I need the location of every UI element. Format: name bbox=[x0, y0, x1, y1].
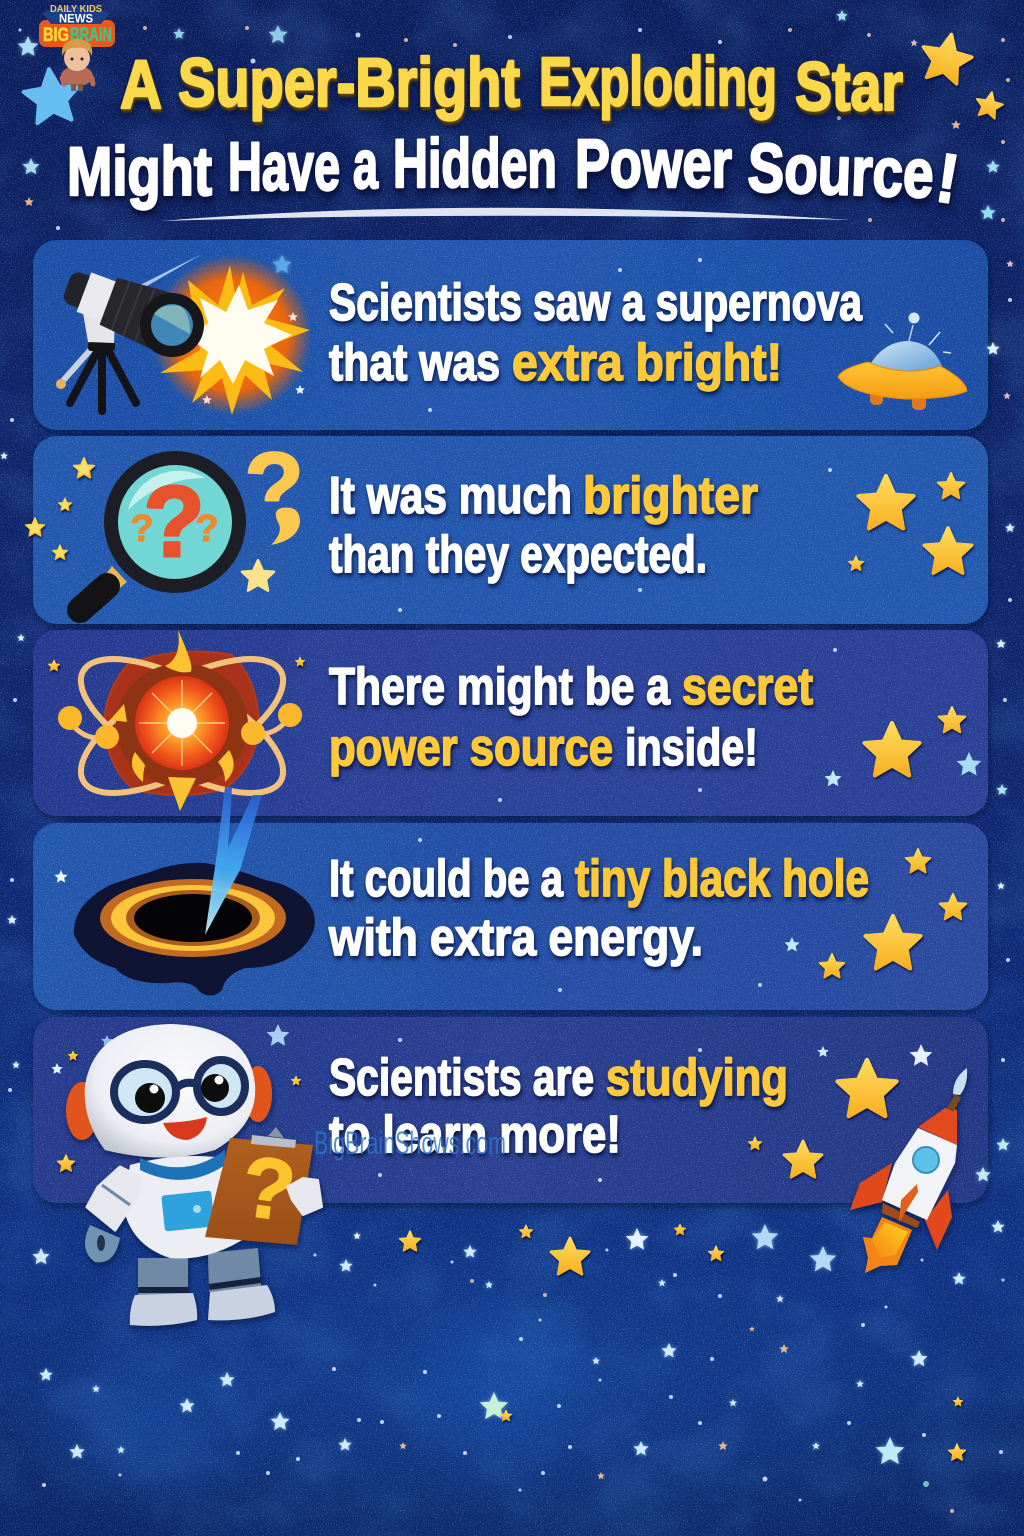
logo text: news: NEWS bbox=[59, 12, 93, 26]
mascot boy bbox=[61, 39, 93, 91]
logo: Daily Kids News with Big Brain bbox=[22, 4, 115, 124]
line 1 gold: secret bbox=[682, 658, 813, 716]
panel: scientists studying bbox=[33, 1017, 988, 1203]
panel 2 text bbox=[329, 467, 758, 584]
dark red shell bbox=[104, 652, 259, 795]
line 1 white: Scientists are bbox=[329, 1049, 594, 1107]
inner shell bbox=[116, 663, 248, 787]
panel 4 text bbox=[328, 850, 869, 967]
collar bbox=[140, 1150, 225, 1180]
panel 5 stars bbox=[57, 1051, 896, 1177]
window bbox=[913, 1147, 939, 1173]
core centre bbox=[167, 708, 197, 738]
small orange question mark left: ? bbox=[130, 508, 154, 550]
title line 1 bbox=[120, 43, 903, 125]
inner brown ring bbox=[126, 890, 260, 946]
panel 1 text bbox=[329, 274, 863, 392]
title line 2: Source bbox=[746, 129, 935, 212]
watermark: BigBrainShows.com bbox=[314, 1125, 506, 1161]
logo band bbox=[39, 20, 115, 47]
spike bottom bbox=[168, 777, 196, 811]
electrons bbox=[58, 703, 302, 749]
panel 3 text bbox=[329, 658, 813, 777]
head bbox=[85, 1024, 255, 1158]
handle collar bbox=[104, 566, 127, 592]
icon: supernova explosion bbox=[152, 255, 312, 415]
crescent right bbox=[218, 750, 234, 782]
icon: black hole bbox=[74, 863, 315, 996]
line 2 gold: extra bright! bbox=[512, 334, 782, 392]
icon: rocket bbox=[850, 1068, 967, 1273]
logo text: brain: BRAIN bbox=[70, 25, 112, 46]
icon: glowing star bbox=[233, 550, 283, 597]
line 1 gold: brighter bbox=[583, 467, 758, 525]
legs bbox=[138, 1258, 188, 1295]
icon: atom core bbox=[58, 630, 302, 819]
panel 2 stars left bbox=[26, 458, 94, 559]
handle bbox=[80, 586, 107, 610]
left arm bbox=[87, 1167, 140, 1230]
panel 5 pale stars bbox=[51, 1024, 932, 1074]
icon: magnifying glass with question marks bbox=[80, 451, 246, 610]
frame bbox=[104, 451, 246, 593]
line 2: with extra energy. bbox=[328, 909, 703, 967]
panel 4 pale stars bbox=[54, 870, 800, 951]
event horizon bbox=[134, 894, 252, 942]
gold stars: sky bbox=[291, 29, 1005, 1460]
hook arm bbox=[85, 1225, 120, 1262]
panel: brighter than expected bbox=[33, 436, 988, 624]
center fin bbox=[899, 1184, 918, 1222]
ears bbox=[66, 1082, 98, 1140]
glasses bbox=[114, 1060, 245, 1120]
saucer legs bbox=[870, 390, 883, 405]
panel: supernova seen bbox=[33, 240, 988, 430]
line 2: than they expected. bbox=[329, 526, 707, 584]
line 2 white: inside! bbox=[625, 719, 758, 777]
logo text: daily kids: DAILY KIDS bbox=[50, 4, 102, 15]
hand bbox=[287, 1178, 322, 1215]
title line 1: A bbox=[120, 46, 162, 123]
icon: blue star bbox=[22, 66, 82, 124]
tube bbox=[56, 257, 183, 354]
line 1 gold: tiny black hole bbox=[575, 850, 869, 908]
right fin bbox=[925, 1190, 952, 1250]
title line 2: ! bbox=[932, 139, 964, 218]
outer ring bbox=[100, 879, 286, 957]
title line 2: Power bbox=[575, 125, 732, 202]
icon: beam of light bbox=[205, 787, 262, 935]
flame bbox=[863, 1217, 912, 1273]
chest screen bbox=[161, 1190, 215, 1232]
title line 2 bbox=[67, 125, 964, 218]
clipboard question mark: ? bbox=[235, 1138, 301, 1240]
logo badge top bbox=[42, 6, 110, 24]
small orange question mark right: ? bbox=[195, 508, 219, 550]
icon: yellow question mark: ? bbox=[244, 432, 304, 542]
mouth bbox=[163, 1117, 207, 1140]
signal ticks bbox=[885, 324, 951, 353]
line 1 white: It could be a bbox=[329, 850, 564, 908]
line 1: Scientists saw a supernova bbox=[329, 274, 863, 332]
line 2: to learn more! bbox=[329, 1106, 621, 1164]
panel 2 stars right bbox=[848, 473, 972, 573]
nozzle bbox=[882, 1203, 920, 1228]
clip bbox=[251, 1135, 296, 1148]
line 1 gold: studying bbox=[606, 1049, 788, 1107]
title line 1: Exploding bbox=[539, 43, 777, 120]
left fin bbox=[850, 1163, 892, 1210]
shooting streak bbox=[138, 254, 202, 290]
panel: secret power source bbox=[33, 630, 988, 816]
crescent top bbox=[165, 630, 192, 672]
panel: tiny black hole bbox=[33, 823, 988, 1010]
pupils bbox=[135, 1083, 165, 1113]
dark cloud bbox=[74, 863, 315, 996]
line 2 gold: power source bbox=[329, 719, 613, 777]
lens bbox=[118, 465, 232, 579]
body bbox=[882, 1128, 957, 1220]
panel 4 stars bbox=[820, 849, 966, 978]
title line 2: Hidden bbox=[393, 125, 557, 202]
gold ring bbox=[111, 885, 275, 951]
panel 3 stars bbox=[48, 657, 965, 775]
line 1 white: There might be a bbox=[329, 658, 671, 716]
line 2 white: that was bbox=[329, 334, 500, 392]
clipboard bbox=[205, 1138, 313, 1245]
icon: flying saucer bbox=[838, 312, 967, 410]
title line 2: Have bbox=[228, 128, 340, 205]
core rays bbox=[139, 680, 225, 766]
torso bbox=[123, 1156, 250, 1259]
saucer body bbox=[838, 362, 967, 399]
antenna bbox=[909, 325, 913, 341]
tripod back leg bbox=[61, 348, 92, 383]
crescent left bbox=[132, 752, 145, 782]
panel 3 pale stars bbox=[824, 752, 981, 786]
arrow left bbox=[110, 704, 127, 722]
title line 2: Might bbox=[67, 133, 212, 210]
feet bbox=[130, 1293, 197, 1326]
orbits bbox=[62, 633, 302, 819]
glowing core bbox=[135, 676, 229, 770]
mount bbox=[83, 313, 115, 343]
large red question mark: ? bbox=[143, 466, 205, 578]
icon: telescope lens bbox=[140, 293, 204, 357]
title bbox=[67, 43, 964, 221]
icon: telescope bbox=[56, 254, 202, 411]
logo text: big: BIG bbox=[43, 25, 69, 46]
title underline swoosh bbox=[160, 208, 850, 221]
title line 1: Super-Bright bbox=[178, 44, 520, 121]
title line 2: a bbox=[353, 126, 378, 203]
title line 1: Star bbox=[795, 48, 903, 125]
tripod legs bbox=[70, 350, 136, 411]
icon: robot scientist bbox=[66, 1024, 322, 1326]
panel 5 text bbox=[329, 1049, 788, 1164]
dome bbox=[866, 341, 944, 372]
line 1 white: It was much bbox=[329, 467, 572, 525]
antenna bbox=[950, 1096, 958, 1110]
nose cone bbox=[918, 1108, 957, 1145]
